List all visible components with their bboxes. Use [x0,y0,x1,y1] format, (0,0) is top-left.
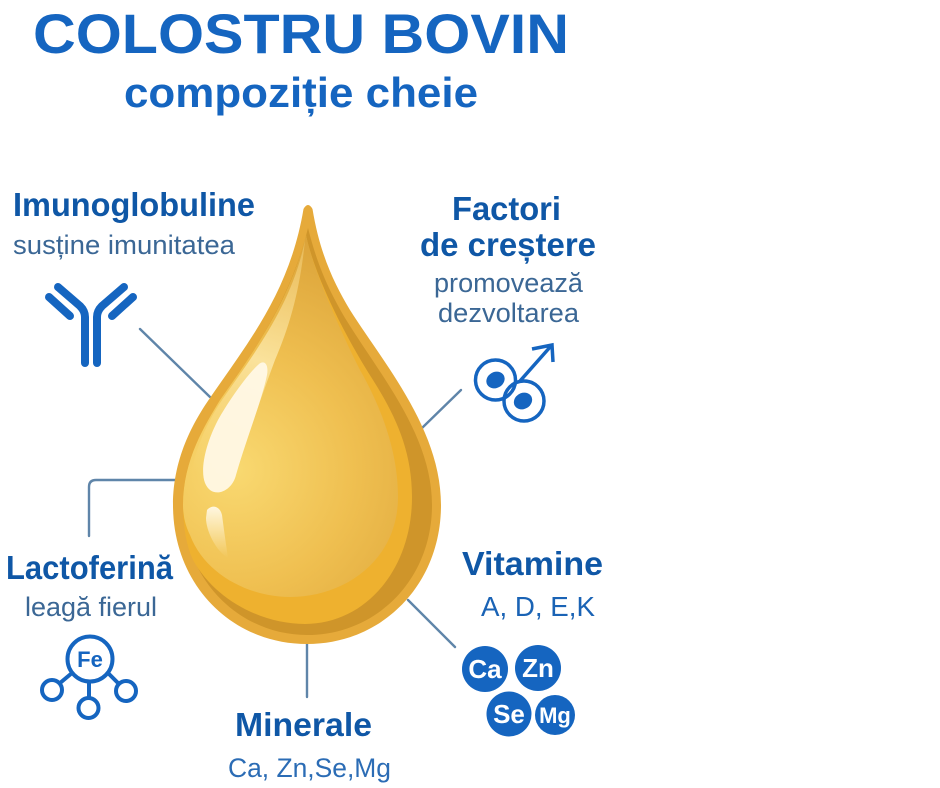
icon: mineral badges [462,645,575,736]
subtitle: compoziție cheie [124,69,478,117]
label: Vitamine: A, D, E,K [481,591,595,622]
bright band [183,235,412,624]
label: Minerale: Minerale [235,706,372,743]
label: Factori de creștere: Factori [452,190,561,227]
icon: iron molecule: Fe [77,647,103,672]
label: Factori de creștere: promovează [434,268,584,298]
label: Imunoglobuline: Imunoglobuline [13,186,255,223]
icon: mineral badges: Mg [539,703,571,728]
connector lines [89,329,461,697]
label: Lactoferină [6,549,174,622]
label: Minerale [228,706,391,783]
gloss band [190,240,305,490]
small highlight [206,507,228,558]
icon: antibody [49,287,133,363]
icon: iron molecule [42,636,136,718]
label: Minerale: Ca, Zn,Se,Mg [228,753,391,783]
label: Lactoferină: leagă fierul [25,592,157,622]
icon: mineral badges: Se [493,699,525,729]
icon: mineral badges: Zn [522,653,554,683]
label: Vitamine [462,545,603,622]
core [183,235,398,597]
drop outline [173,205,441,644]
highlight [203,362,267,492]
icon: mineral badges: Ca [468,654,502,684]
drop [173,205,441,644]
dark band [183,228,432,635]
label: Vitamine: Vitamine [462,545,603,582]
label: Imunoglobuline: susține imunitatea [13,230,236,260]
label: Factori de creștere [420,190,596,328]
icon: dividing cells [476,345,553,421]
label: Factori de creștere: de creștere [420,226,596,264]
label: Lactoferină: Lactoferină [6,549,174,586]
label: Factori de creștere: dezvoltarea [438,298,580,328]
label: Imunoglobuline [13,186,255,260]
title: COLOSTRU BOVIN [33,2,569,65]
